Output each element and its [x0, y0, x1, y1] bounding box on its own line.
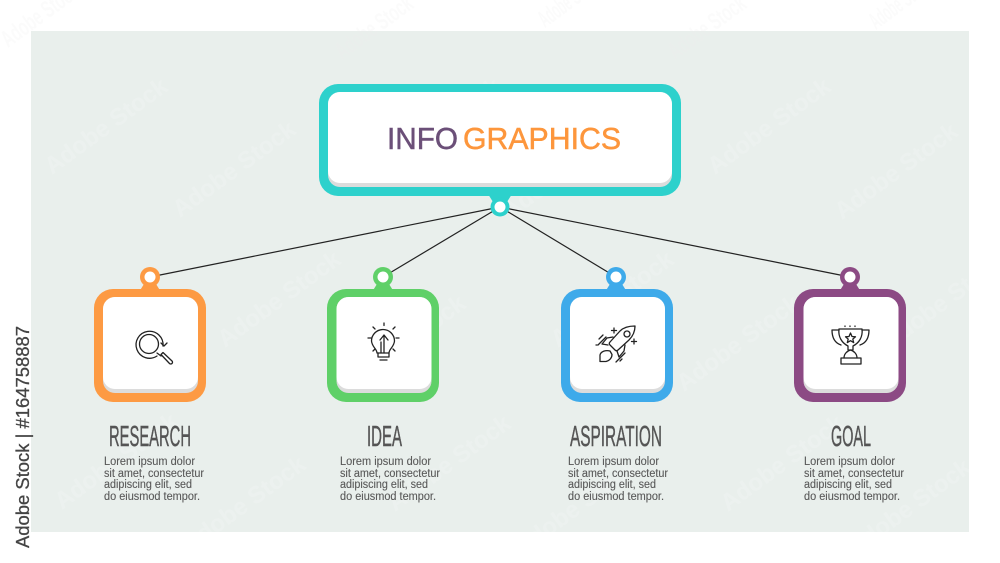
watermark pattern: Adobe Stock [672, 289, 805, 397]
watermark pattern: Adobe Stock [498, 117, 631, 225]
heading and text: idea: IDEA [367, 421, 402, 453]
title box [319, 84, 681, 216]
heading and text: aspiration: do eiusmod tempor. [568, 491, 664, 503]
heading and text: goal [804, 421, 904, 503]
heading and text: research: Lorem ipsum dolor [104, 456, 195, 468]
heading and text: idea: sit amet, consectetur [340, 468, 440, 480]
stock credit: Adobe Stock | #164758887 [13, 326, 33, 548]
heading and text: idea [340, 421, 440, 503]
connector lines [150, 207, 850, 277]
heading and text: research [104, 421, 204, 503]
watermark pattern: Adobe Stock [50, 407, 183, 515]
icon: magnifier [136, 331, 173, 364]
heading and text: aspiration: ASPIRATION [570, 421, 662, 453]
title text: GRAPHICS [463, 121, 621, 156]
watermark pattern: Adobe Stock [843, 453, 976, 561]
heading and text: idea: Lorem ipsum dolor [340, 456, 431, 468]
heading and text: idea: adipiscing elit, sed [340, 479, 428, 491]
watermark pattern: Adobe Stock [510, 453, 643, 561]
heading and text: research: adipiscing elit, sed [104, 479, 192, 491]
heading and text: aspiration [568, 421, 668, 503]
heading and text: idea: do eiusmod tempor. [340, 491, 436, 503]
watermark pattern: Adobe Stock [830, 117, 963, 225]
icon: light bulb [368, 323, 399, 360]
heading and text: aspiration: adipiscing elit, sed [568, 479, 656, 491]
heading and text: aspiration: sit amet, consectetur [568, 468, 668, 480]
title text: INFO [387, 121, 458, 156]
heading and text: research: do eiusmod tempor. [104, 491, 200, 503]
watermark pattern: Adobe Stock [383, 409, 516, 517]
icon: rocket [596, 326, 636, 362]
watermark pattern: Adobe Stock [716, 409, 849, 517]
heading and text: goal: do eiusmod tempor. [804, 491, 900, 503]
heading and text: goal: GOAL [831, 421, 871, 453]
heading and text: goal: sit amet, consectetur [804, 468, 904, 480]
heading and text: goal: Lorem ipsum dolor [804, 456, 895, 468]
watermark pattern: Adobe Stock [168, 115, 301, 223]
watermark pattern: Adobe Stock [338, 289, 471, 397]
watermark pattern: Adobe Stock [40, 72, 173, 180]
card: aspiration [561, 267, 673, 402]
card: research [94, 267, 206, 402]
watermark pattern: Adobe Stock [703, 72, 836, 180]
heading and text: aspiration: Lorem ipsum dolor [568, 456, 659, 468]
card: goal [794, 267, 906, 402]
watermark pattern: Adobe Stock [213, 245, 346, 353]
watermark pattern: Adobe Stock [546, 245, 679, 353]
watermark pattern: Adobe Stock [373, 72, 506, 180]
heading and text: goal: adipiscing elit, sed [804, 479, 892, 491]
icon: trophy [832, 326, 869, 364]
card: idea [327, 267, 439, 402]
heading and text: research: RESEARCH [109, 421, 191, 453]
watermark pattern: Adobe Stock [178, 450, 311, 558]
heading and text: research: sit amet, consectetur [104, 468, 204, 480]
